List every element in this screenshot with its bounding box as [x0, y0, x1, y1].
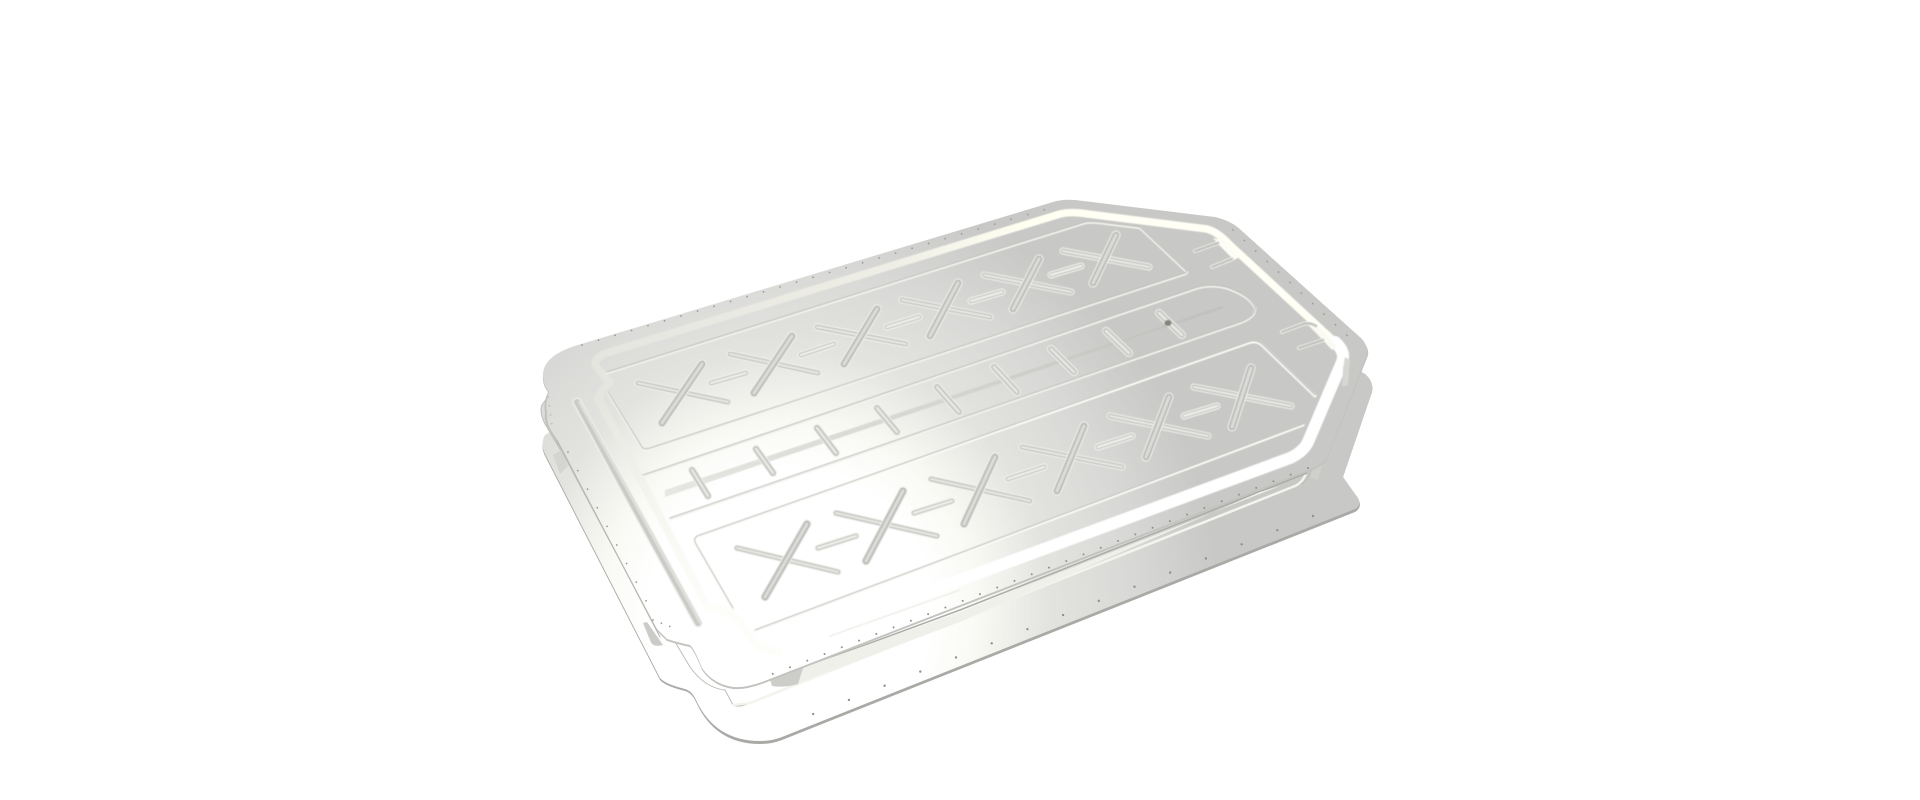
small corner slots: [1195, 243, 1323, 348]
lower edge rivet holes: [762, 468, 1308, 678]
panel: bottom plate: [542, 340, 1372, 744]
top edge rivet holes: [582, 205, 1060, 345]
X-shaped stiffening ribs: [638, 235, 1291, 597]
lower compartment groove: [695, 341, 1315, 636]
perimeter band upper edge: [595, 213, 1335, 398]
corner fold: [643, 622, 663, 646]
center channel groove: [643, 285, 1255, 519]
center spine rib with cross ticks: [665, 306, 1223, 497]
panel: middle raised plate: [541, 250, 1340, 706]
perimeter band left edge: [598, 398, 787, 651]
long left groove: [577, 402, 700, 623]
right edge rivet holes: [1233, 230, 1352, 340]
left edge rivet holes: [568, 452, 652, 612]
side fold: [1310, 446, 1326, 480]
upper compartment groove: [607, 222, 1187, 450]
bright band lower right: [787, 342, 1343, 650]
corner rivet holes: [653, 620, 671, 627]
left edge seam: [557, 440, 660, 637]
dark spot on spine: [1164, 320, 1172, 326]
upper right fold pieces: [1213, 238, 1238, 260]
embossed surface details: [577, 213, 1350, 651]
panel: top plate: [543, 200, 1368, 689]
left slot: [553, 450, 568, 474]
bottom plate rivet holes: [778, 516, 1313, 728]
